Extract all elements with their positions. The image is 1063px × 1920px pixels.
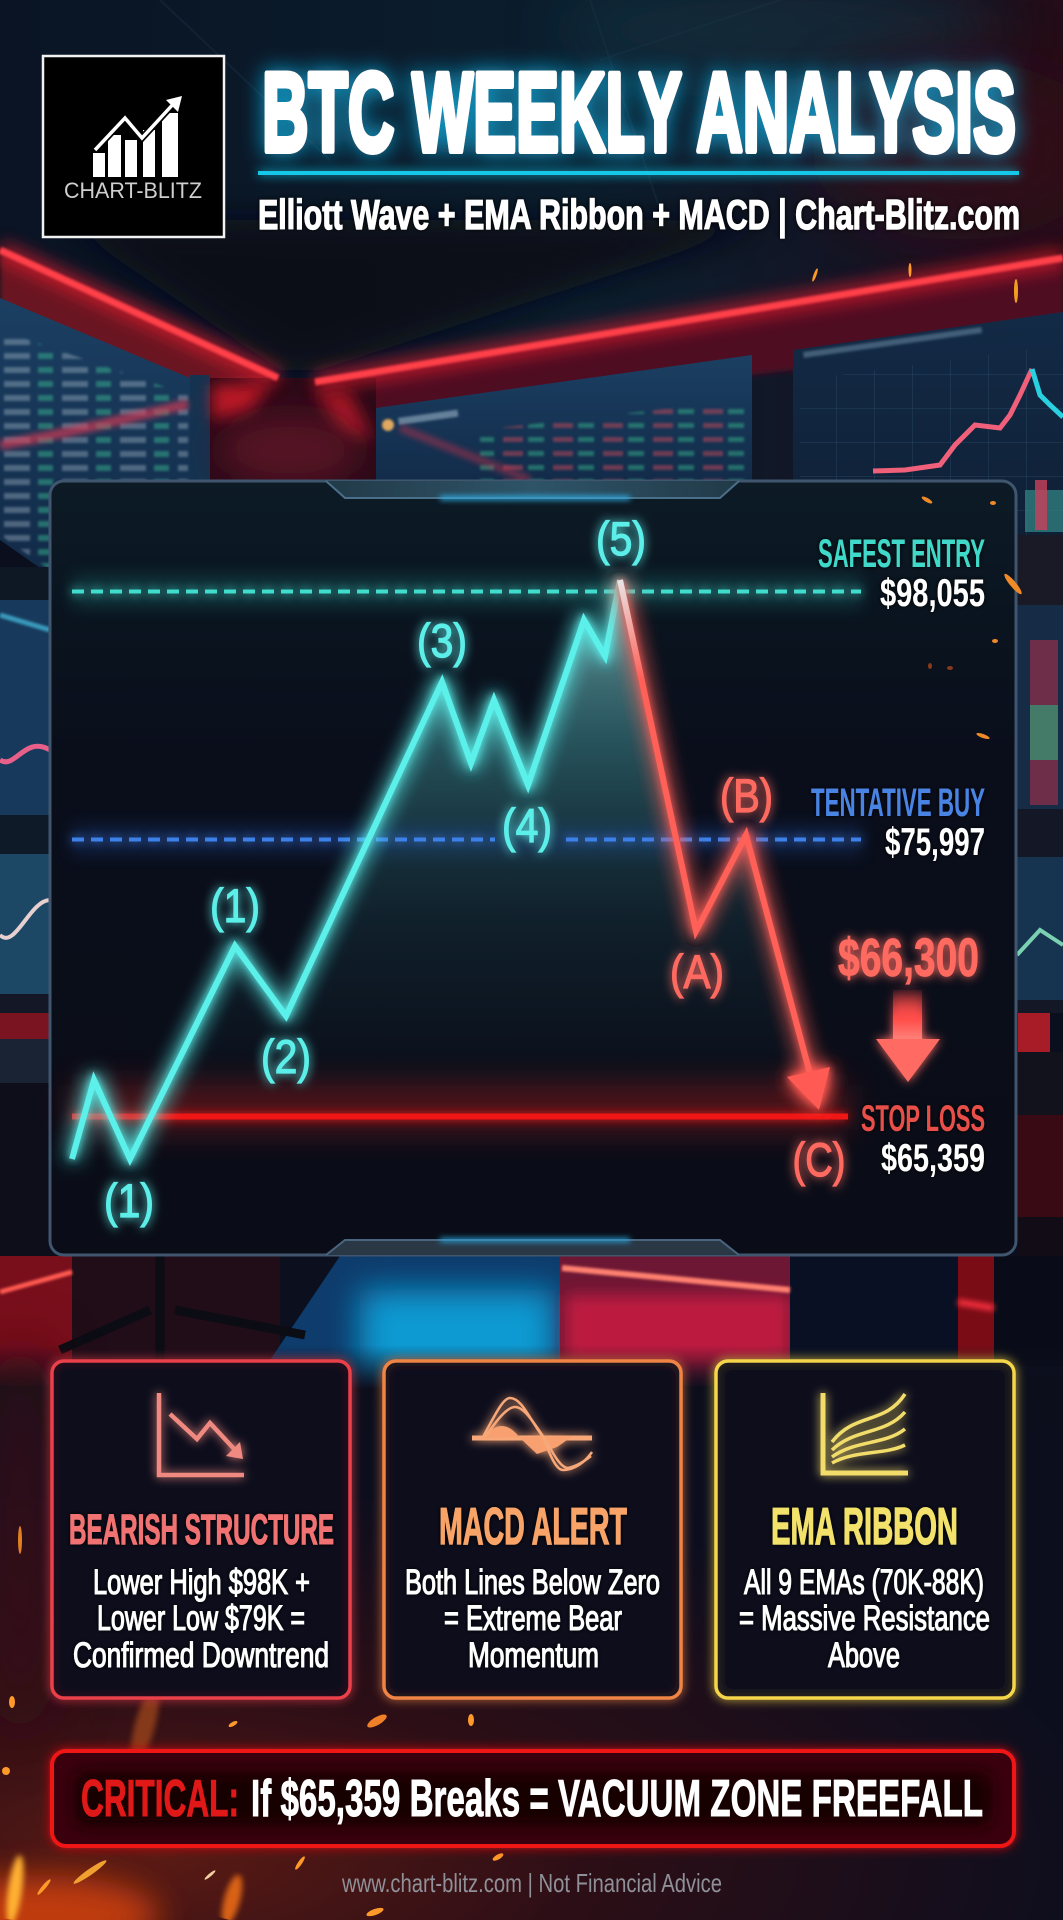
body text: Confirmed Downtrend <box>73 1636 329 1675</box>
wave labels: (1) <box>210 879 260 932</box>
panel: Elliott Wave chart <box>50 481 1024 1255</box>
wave labels: (4) <box>502 799 552 852</box>
wave labels: (C) <box>792 1133 846 1186</box>
body text <box>73 1563 329 1675</box>
chart: area under wave <box>130 580 819 1110</box>
wave peak highlight <box>620 580 641 677</box>
safest entry dashed line <box>72 590 861 594</box>
critical label: CRITICAL: <box>81 1770 239 1828</box>
title underline <box>258 171 1019 175</box>
icon: MACD wave <box>472 1398 592 1470</box>
body text: Above <box>828 1636 900 1675</box>
body text <box>405 1563 660 1675</box>
floor with reflections <box>0 1256 1063 1390</box>
body text: Momentum <box>468 1636 599 1675</box>
value: 98,055: $98,055 <box>880 572 985 615</box>
logo wordmark: CHART-BLITZ <box>64 178 202 203</box>
wave labels: (1) <box>104 1174 154 1227</box>
down arrow <box>876 990 940 1082</box>
side screens left <box>0 567 50 1258</box>
wave labels: (B) <box>720 769 773 822</box>
wave: impulse teal <box>72 580 620 1159</box>
panel: EMA ribbon <box>716 1361 1014 1698</box>
value: 65,359: $65,359 <box>881 1137 985 1180</box>
value: 66,300: $66,300 <box>838 928 979 988</box>
panel bottom notch <box>326 1238 739 1255</box>
heading: bearish structure: BEARISH STRUCTURE <box>69 1506 334 1554</box>
wave labels: (5) <box>596 512 646 565</box>
body text: Lower Low $79K = <box>97 1599 305 1638</box>
panel: MACD alert <box>384 1361 681 1698</box>
panel: bearish structure <box>52 1361 350 1698</box>
side screens right <box>1017 535 1063 1262</box>
icon: falling chart <box>159 1393 244 1475</box>
left wall screen <box>0 298 190 575</box>
wave labels <box>104 512 846 1227</box>
panel sparks <box>921 495 1024 740</box>
logo icon: rising bar chart <box>93 96 182 177</box>
logo box <box>43 56 224 237</box>
body text <box>739 1563 990 1675</box>
lower background glow and fire <box>0 1340 1063 1920</box>
wave: corrective red with arrow <box>620 580 830 1110</box>
wave labels: (3) <box>417 614 467 667</box>
footer: www.chart-blitz.com | Not Financial Advice <box>341 1868 722 1898</box>
wave labels: (2) <box>261 1030 311 1083</box>
panel top notch <box>326 481 739 500</box>
body text: Lower High $98K + <box>93 1563 310 1602</box>
center wall screen <box>376 355 752 490</box>
heading: MACD alert: MACD ALERT <box>439 1498 627 1556</box>
value: 75,997: $75,997 <box>885 821 985 864</box>
stop loss line <box>72 1114 848 1120</box>
tentative buy dashed line <box>72 838 861 842</box>
body text: = Extreme Bear <box>444 1599 622 1638</box>
body text: Both Lines Below Zero <box>405 1563 660 1602</box>
callout: critical warning <box>52 1751 1014 1846</box>
icon: EMA ribbon <box>823 1393 908 1473</box>
level glow haze <box>72 575 862 1130</box>
red neon ceiling lines <box>0 250 1063 382</box>
wave labels: (A) <box>670 945 724 998</box>
right wall screen <box>793 312 1063 535</box>
